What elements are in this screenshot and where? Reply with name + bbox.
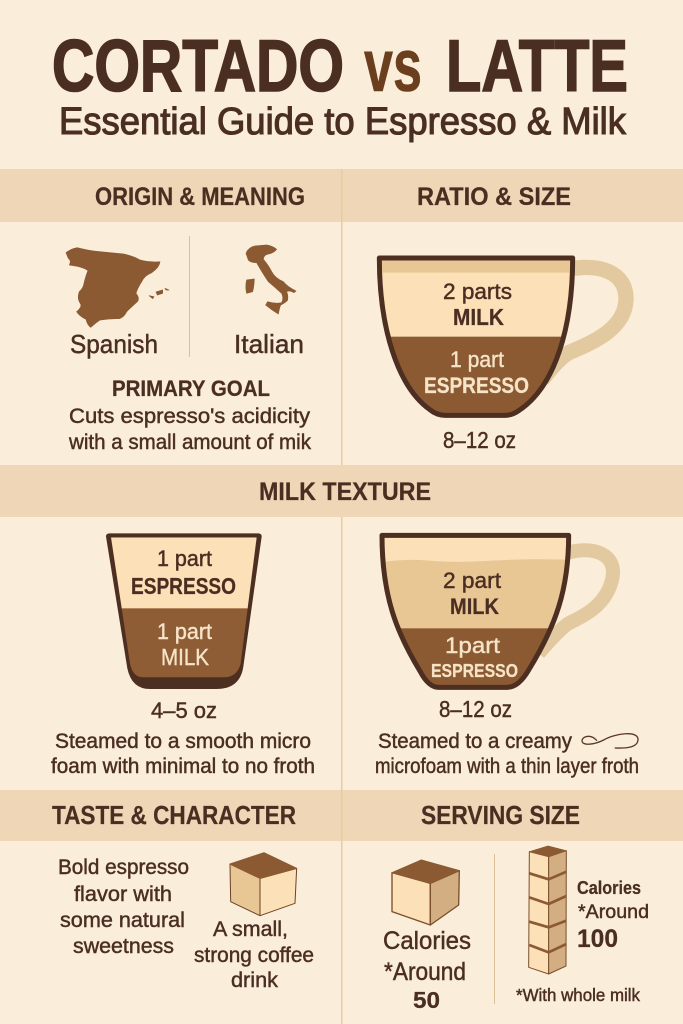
- cortado calories: Calories: [383, 927, 471, 955]
- size label: 8–12 oz: [439, 696, 512, 722]
- icon: latte cup with layers: [375, 257, 626, 418]
- size label: 8–12 oz: [443, 427, 516, 453]
- glass labels: 1 part: [157, 546, 212, 571]
- flavor description: [58, 856, 189, 958]
- latte calories: *Around: [578, 901, 649, 923]
- cup labels: 1part: [445, 633, 500, 658]
- panel: origin and meaning: [66, 236, 311, 454]
- panel: serving size: [383, 846, 649, 1013]
- flavor description: Bold espresso: [58, 856, 189, 879]
- description: foam with minimal to no froth: [51, 755, 315, 778]
- cup labels: 1 part: [450, 347, 504, 372]
- cortado calories: [383, 927, 471, 1013]
- description: [51, 730, 315, 778]
- label: Italian: Italian: [234, 329, 304, 359]
- panel: taste and character: [58, 853, 314, 992]
- description: [375, 730, 639, 778]
- drink description: strong coffee: [194, 944, 314, 967]
- flavor description: sweetness: [73, 935, 174, 958]
- drink description: A small,: [213, 918, 288, 941]
- cup labels: 2 part: [443, 568, 501, 593]
- glass labels: ESPRESSO: [131, 573, 236, 599]
- cortado calories: 50: [413, 987, 440, 1013]
- icon: map of Italy: [246, 245, 296, 314]
- header band: taste and serving: [0, 790, 683, 841]
- primary goal text: Cuts espresso's acidicity: [69, 404, 310, 428]
- panel: cortado texture: [51, 533, 315, 778]
- icon: single cube: [392, 860, 459, 925]
- header band: milk texture: MILK TEXTURE: [259, 478, 431, 506]
- label: Spanish: Spanish: [70, 329, 158, 359]
- icon: latte cup with foam: [375, 533, 613, 690]
- icon: foam swirl: [582, 734, 638, 748]
- description: Steamed to a creamy: [378, 730, 572, 753]
- size label: 4–5 oz: [151, 698, 217, 723]
- title: [52, 24, 628, 107]
- latte calories: 100: [577, 925, 618, 953]
- footnote: *With whole milk: [516, 985, 640, 1005]
- cup labels: [431, 568, 518, 681]
- cup labels: [424, 279, 529, 398]
- header band: origin and ratio: ORIGIN & MEANING: [95, 183, 305, 211]
- panel: latte texture: [375, 533, 639, 778]
- cup labels: MILK: [453, 304, 504, 330]
- latte calories: [577, 877, 649, 953]
- panel: ratio and size: [375, 257, 626, 453]
- flavor description: flavor with: [74, 883, 172, 906]
- glass labels: MILK: [161, 644, 210, 670]
- cup labels: MILK: [450, 594, 499, 619]
- subtitle: Essential Guide to Espresso & Milk: [59, 101, 627, 143]
- primary goal text: [68, 376, 311, 454]
- header band: origin and ratio: RATIO & SIZE: [417, 183, 571, 211]
- icon: map of Spain: [66, 248, 169, 327]
- drink description: drink: [231, 969, 279, 992]
- header band: taste and serving: SERVING SIZE: [421, 800, 580, 830]
- primary goal text: with a small amount of mik: [68, 430, 311, 454]
- cup labels: ESPRESSO: [424, 373, 529, 398]
- header band: origin and ratio: [0, 169, 683, 222]
- drink description: [194, 918, 314, 992]
- header band: taste and serving: TASTE & CHARACTER: [52, 800, 296, 830]
- icon: small cube: [230, 853, 297, 916]
- description: Steamed to a smooth micro: [55, 730, 311, 753]
- icon: stack of five cubes: [529, 846, 566, 974]
- cortado calories: *Around: [384, 958, 466, 986]
- header band: milk texture: [0, 465, 683, 517]
- flavor description: some natural: [60, 909, 185, 932]
- icon: cortado glass: [106, 533, 263, 689]
- glass labels: 1 part: [157, 619, 212, 644]
- cup labels: 2 parts: [443, 279, 512, 304]
- title: LATTE: [446, 26, 628, 107]
- description: microfoam with a thin layer froth: [375, 755, 639, 778]
- title: CORTADO: [52, 26, 344, 107]
- glass labels: [131, 546, 236, 670]
- primary goal text: PRIMARY GOAL: [112, 376, 270, 401]
- latte calories: Calories: [577, 877, 641, 898]
- cup labels: ESPRESSO: [431, 660, 518, 681]
- title: vs: [364, 24, 422, 107]
